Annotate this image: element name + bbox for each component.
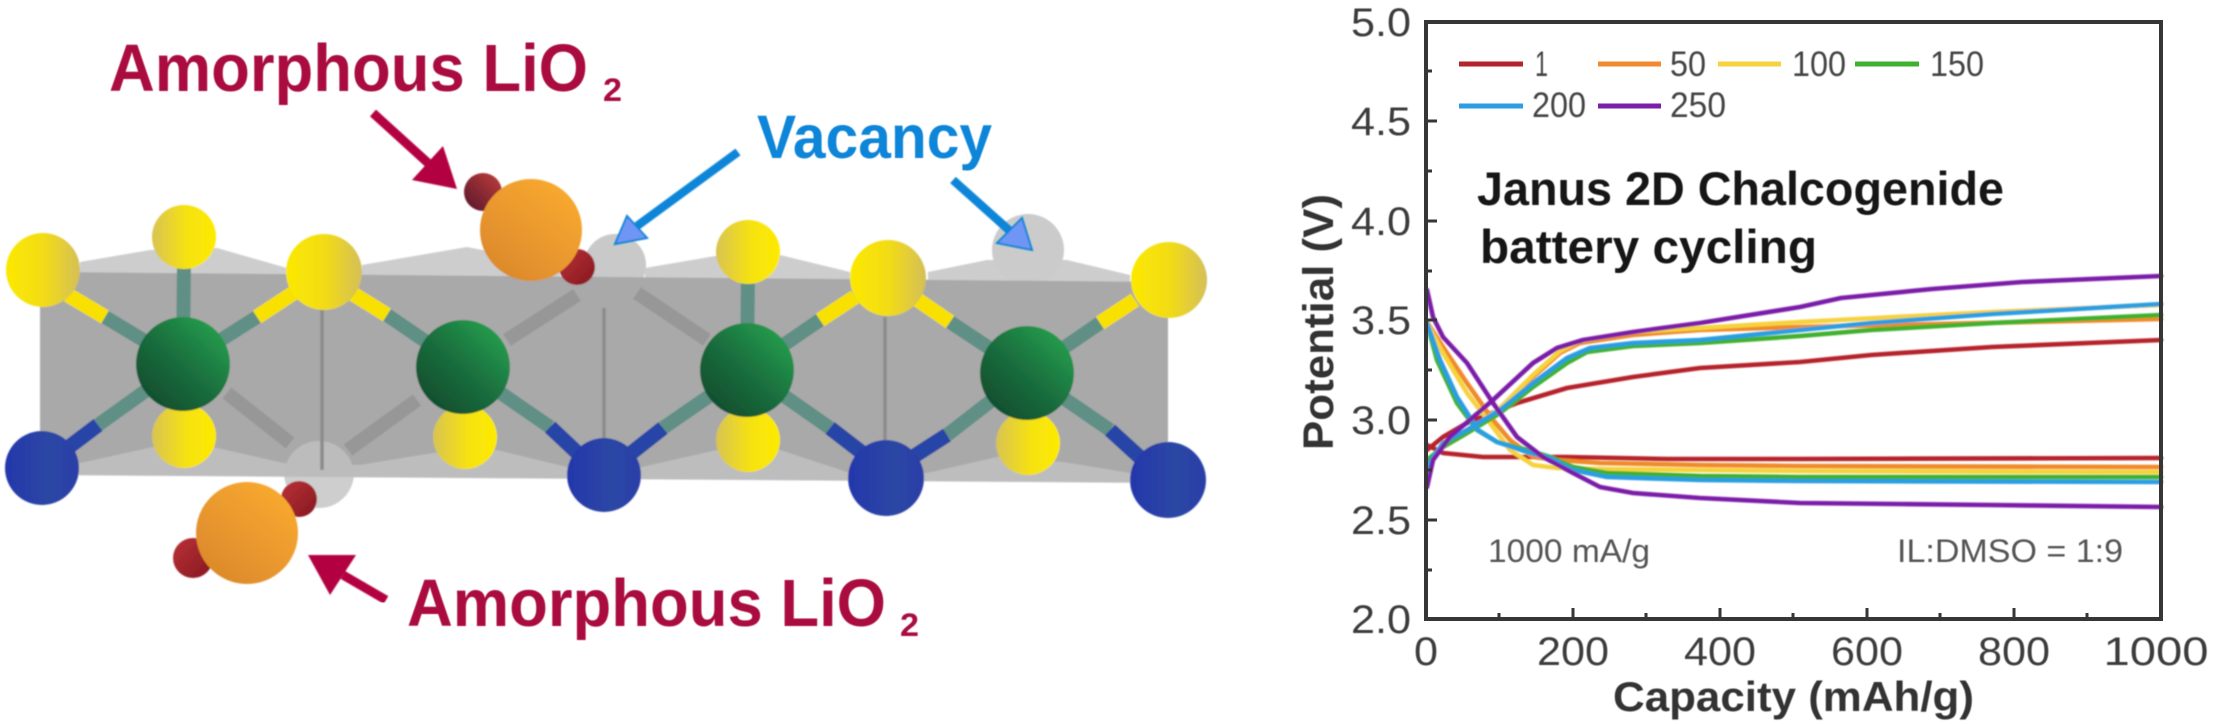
arrow: to middle vacancy (615, 152, 738, 244)
chart heading: Janus 2D Chalcogenide (1477, 162, 2004, 215)
label: Vacancy: Vacancy (757, 103, 992, 171)
prism lower light face (40, 272, 1168, 483)
y axis tick labels: 4.5 (1351, 100, 1411, 144)
y axis tick labels: 3.5 (1351, 299, 1411, 343)
annotation: current density: 1000 mA/g (1488, 533, 1650, 569)
legend entry 150 (1855, 45, 1984, 84)
x axis tick labels: 600 (1831, 630, 1903, 674)
prism upper light faces (80, 247, 1130, 285)
y axis tick labels: 2.5 (1351, 499, 1411, 543)
panel: cycling chart (1295, 1, 2208, 720)
legend entry 50: 50 (1670, 45, 1706, 84)
x axis tick labels: 800 (1978, 630, 2050, 674)
x axis title: Capacity (mAh/g) (1613, 673, 1974, 720)
y axis tick labels: 4.0 (1351, 200, 1411, 244)
x axis tick labels: 1000 (2104, 630, 2208, 674)
legend entry 100 (1718, 45, 1846, 84)
chart heading: battery cycling (1480, 220, 1817, 273)
label: Amorphous LiO2 top: Amorphous LiO (109, 31, 588, 106)
upper chalcogen atoms, yellow (6, 205, 1207, 318)
legend entry 250: 250 (1670, 86, 1726, 125)
cell divider lines (322, 308, 885, 470)
LiO2 cluster, bottom (173, 481, 317, 584)
charge and discharge curves (1427, 276, 2161, 507)
lower chalcogen atoms, blue (5, 431, 1206, 518)
vacancy site, lower outer part (284, 438, 354, 508)
x axis tick labels: 0 (1414, 630, 1438, 674)
metal atoms, green (136, 317, 1074, 420)
axes frame (1426, 22, 2161, 619)
cycle 1 curve, red (1427, 340, 2161, 459)
x axis tick labels: 400 (1684, 630, 1756, 674)
arrow: to bottom LiO2 (308, 555, 386, 600)
legend entry 50 (1598, 45, 1706, 84)
label: Amorphous LiO2 bottom: Amorphous LiO (407, 566, 886, 641)
cycle 200 curve, blue (1427, 304, 2161, 482)
y axis title: Potential (V) (1295, 194, 1343, 450)
panel: Janus crystal structure (5, 173, 1207, 584)
legend entry 150: 150 (1930, 45, 1984, 84)
yellow bond halves (68, 292, 1135, 323)
legend entry 1 (1459, 45, 1548, 84)
legend entry 100: 100 (1792, 45, 1846, 84)
arrow: to right vacancy (953, 180, 1032, 250)
blue bond halves (65, 425, 1145, 462)
label: Amorphous LiO2 top: 2 (603, 72, 622, 108)
vacancy site, upper middle (584, 234, 646, 296)
legend entry 1: 1 (1535, 45, 1548, 84)
cycle 250 curve, purple (1427, 276, 2161, 507)
y axis tick labels: 2.0 (1351, 598, 1411, 642)
prism dark front face (40, 272, 1168, 473)
legend entry 200 (1459, 86, 1586, 125)
legend entry 250 (1598, 86, 1726, 125)
cycle 100 curve, yellow (1427, 305, 2161, 472)
vacancy site, upper right (992, 214, 1064, 286)
axis ticks (1426, 71, 2087, 619)
lower chalcogen atoms, yellow (152, 404, 1060, 475)
cycle 150 curve, green (1427, 315, 2161, 477)
missing bonds toward vacancies (227, 293, 707, 450)
chart heading (1477, 162, 2004, 273)
label: Amorphous LiO2 bottom: 2 (900, 607, 919, 643)
y axis tick labels: 3.0 (1351, 399, 1411, 443)
x axis tick labels: 200 (1537, 630, 1609, 674)
arrow: to top LiO2 (373, 113, 457, 189)
y axis tick labels (1351, 1, 1411, 642)
legend (1459, 45, 1984, 125)
y axis tick labels: 5.0 (1351, 1, 1411, 45)
annotation: electrolyte ratio: IL:DMSO = 1:9 (1897, 533, 2123, 569)
x axis tick labels (1414, 630, 2208, 674)
metal-chalcogen teal bonds (98, 260, 1110, 435)
LiO2 cluster, top (464, 173, 595, 285)
vacancy site, lower part inside prism (284, 441, 354, 476)
legend entry 200: 200 (1532, 86, 1586, 125)
cycle 50 curve, orange (1427, 319, 2161, 467)
